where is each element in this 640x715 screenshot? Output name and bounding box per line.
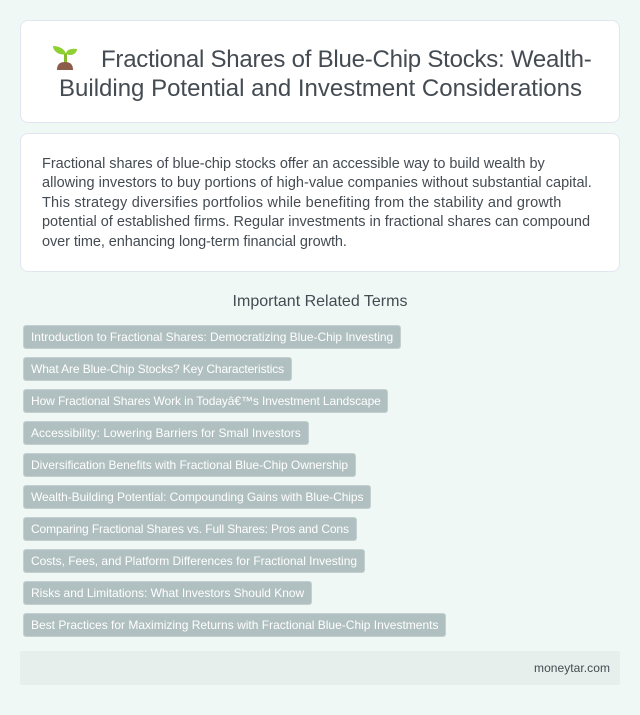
icon: seedling: [53, 46, 77, 70]
tag 10: [23, 613, 446, 637]
intro paragraph: [42, 156, 592, 250]
tag 9: Risks and Limitations: What Investors Should Know: [31, 586, 304, 600]
tag 7: [23, 517, 357, 541]
title line 2: Building Potential and Investment Considerations: [59, 75, 582, 102]
tag 5: Diversification Benefits with Fractional Blue-Chip Ownership: [31, 458, 348, 472]
footer source: moneytar.com: [534, 661, 610, 675]
tag 1: Introduction to Fractional Shares: Democratizing Blue-Chip Investing: [31, 330, 393, 344]
tag 6: [23, 485, 371, 509]
tag 10: Best Practices for Maximizing Returns with Fractional Blue-Chip Investments: [31, 618, 438, 632]
intro card: [20, 133, 620, 272]
tag 2: What Are Blue-Chip Stocks? Key Characteristics: [31, 362, 284, 376]
intro paragraph: This strategy diversifies portfolios while benefiting from the stability and growth: [42, 195, 561, 211]
tag 1: [23, 325, 401, 349]
title line 1: Fractional Shares of Blue-Chip Stocks: Wealth-: [101, 46, 592, 73]
footer bar: [20, 651, 620, 685]
intro paragraph: allowing investors to buy portions of high-value companies without substantial capital.: [42, 175, 592, 191]
intro paragraph: potential of established firms. Regular investments in fractional shares can compound: [42, 214, 590, 230]
tag 7: Comparing Fractional Shares vs. Full Shares: Pros and Cons: [31, 522, 349, 536]
tag 8: [23, 549, 365, 573]
title card: [20, 20, 620, 123]
tag 6: Wealth-Building Potential: Compounding Gains with Blue-Chips: [31, 490, 363, 504]
tag 3: [23, 389, 388, 413]
tag 8: Costs, Fees, and Platform Differences for Fractional Investing: [31, 554, 357, 568]
tag 4: Accessibility: Lowering Barriers for Small Investors: [31, 426, 301, 440]
intro paragraph: Fractional shares of blue-chip stocks offer an accessible way to build wealth by: [42, 156, 545, 172]
tag 3: How Fractional Shares Work in Todayâ€™s Investment Landscape: [31, 394, 381, 408]
intro paragraph: over time, enhancing long-term financial growth.: [42, 234, 347, 250]
section heading: Important Related Terms: [233, 293, 407, 310]
tag 5: [23, 453, 356, 477]
term tags: [23, 325, 446, 637]
tag 4: [23, 421, 309, 445]
tag 9: [23, 581, 312, 605]
tag 2: [23, 357, 292, 381]
